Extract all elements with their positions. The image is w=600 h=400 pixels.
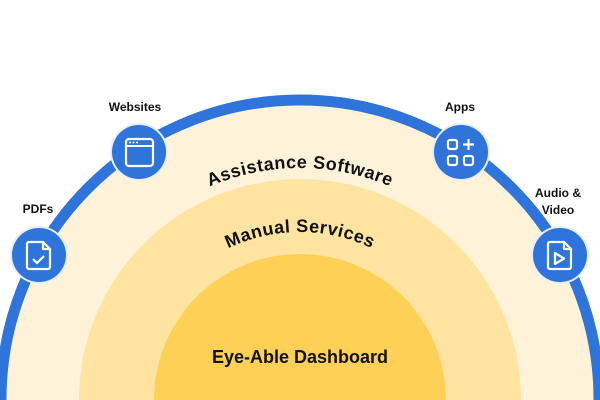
label: Manual Services: Manual Services (224, 219, 374, 248)
label: PDFs: PDFs (23, 202, 54, 216)
icon: audio video (531, 226, 589, 284)
label: Audio & Video: Video (542, 203, 574, 217)
icon: PDFs (10, 226, 68, 284)
label: Apps: Apps (445, 100, 475, 114)
label: Assistance Software: Assistance Software (210, 156, 392, 186)
label: Audio & Video: Audio & (535, 186, 581, 200)
label: Websites: Websites (109, 100, 162, 114)
icon: websites (110, 123, 168, 181)
icon: apps (432, 123, 490, 181)
label: Eye-Able Dashboard: Eye-Able Dashboard (212, 347, 388, 367)
